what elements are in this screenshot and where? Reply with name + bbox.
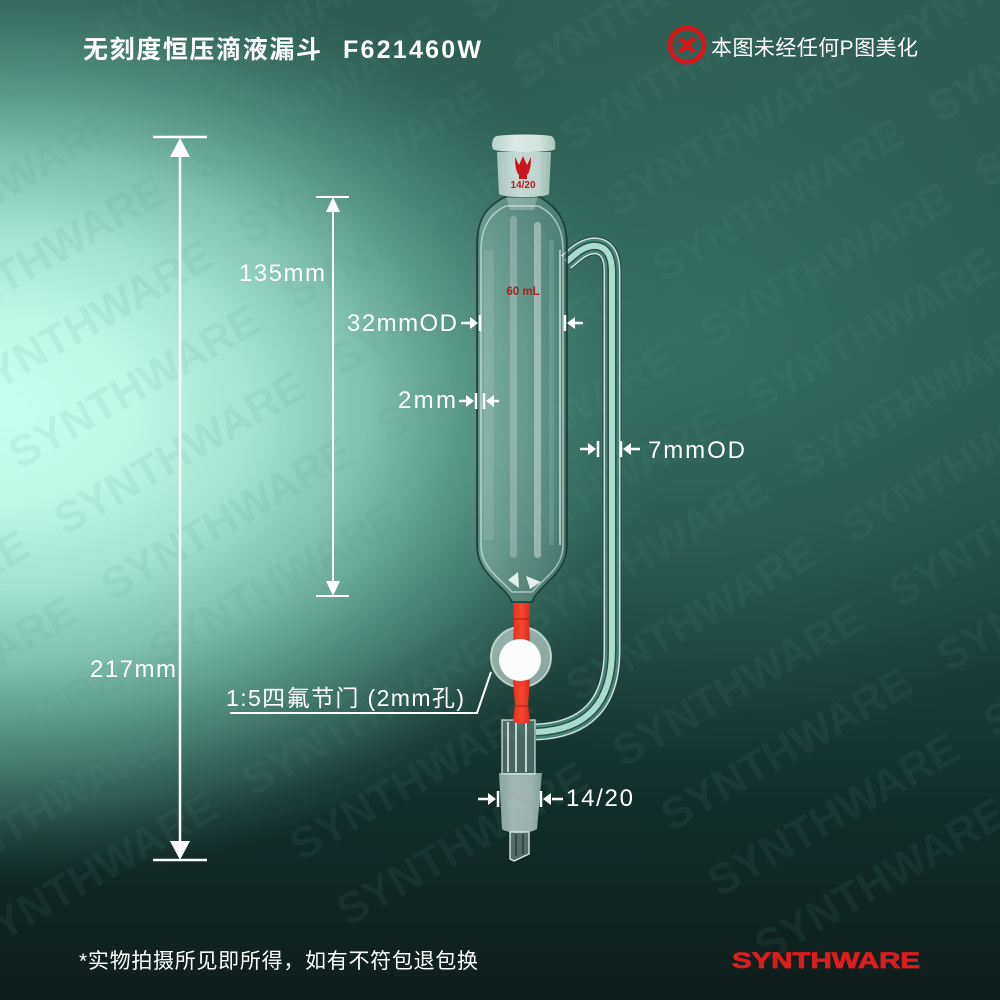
dimension: 2mm wall xyxy=(398,387,499,414)
title xyxy=(83,35,481,64)
dimension: 7mmOD: 7mmOD xyxy=(648,437,745,464)
PTFE stopcock xyxy=(491,603,551,724)
dimension: body height 135mm: 135mm xyxy=(239,260,325,287)
drip tip xyxy=(510,832,529,861)
dimension: 32mmOD: 32mmOD xyxy=(347,310,457,337)
volume mark: 60 mL xyxy=(506,286,540,298)
dimension: 7mmOD xyxy=(580,437,745,464)
brand logo: SYNTHWARE xyxy=(732,948,920,973)
dimension: 2mm wall: 2mm xyxy=(398,387,456,414)
lower tube xyxy=(502,720,535,774)
joint size mark: 14/20 xyxy=(510,180,536,191)
notice text: 本图未经任何P图美化 xyxy=(711,37,918,60)
icon: tulip logo xyxy=(515,156,531,179)
notice badge xyxy=(670,28,918,62)
title: 无刻度恒压滴液漏斗 xyxy=(83,35,321,64)
dimension: body height 135mm xyxy=(239,197,349,596)
title: F621460W xyxy=(343,36,481,64)
icon: red cross in circle xyxy=(670,28,704,62)
dimension: 14/20 xyxy=(478,785,633,812)
side arm tube xyxy=(536,246,612,732)
glass body xyxy=(477,196,567,602)
dimension: 32mmOD xyxy=(347,310,583,337)
dimension: 14/20: 14/20 xyxy=(566,785,633,812)
funnel illustration xyxy=(477,134,612,861)
dimension: total height 217mm xyxy=(90,137,207,860)
stopcock callout xyxy=(226,672,491,713)
stopcock callout: 1:5四氟节门 (2mm孔) xyxy=(226,685,464,711)
ground glass bottom joint xyxy=(499,773,542,833)
ground glass top joint xyxy=(492,134,555,197)
footnote: *实物拍摄所见即所得，如有不符包退包换 xyxy=(79,950,478,973)
dimension: total height 217mm: 217mm xyxy=(90,656,176,683)
